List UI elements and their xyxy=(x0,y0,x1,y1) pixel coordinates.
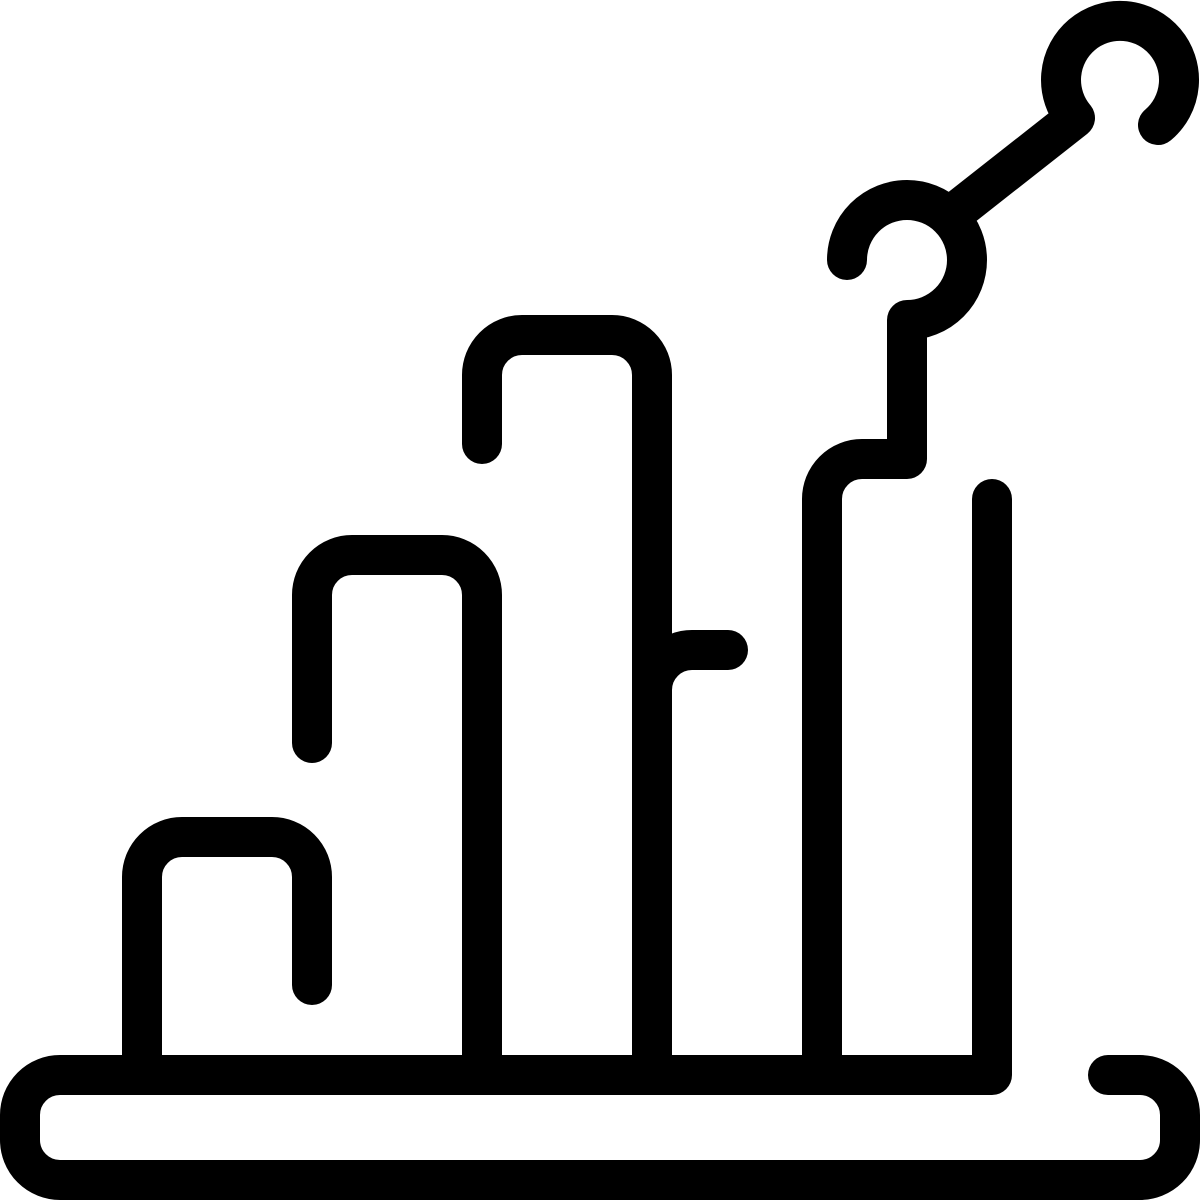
trend line xyxy=(958,21,1179,210)
bar tab xyxy=(652,650,728,690)
bar 2 xyxy=(312,555,482,1075)
bar 4 with trend line xyxy=(822,200,967,1075)
bar 1 xyxy=(142,837,312,1075)
base platform xyxy=(20,499,1180,1180)
bar 3 xyxy=(482,335,652,1075)
